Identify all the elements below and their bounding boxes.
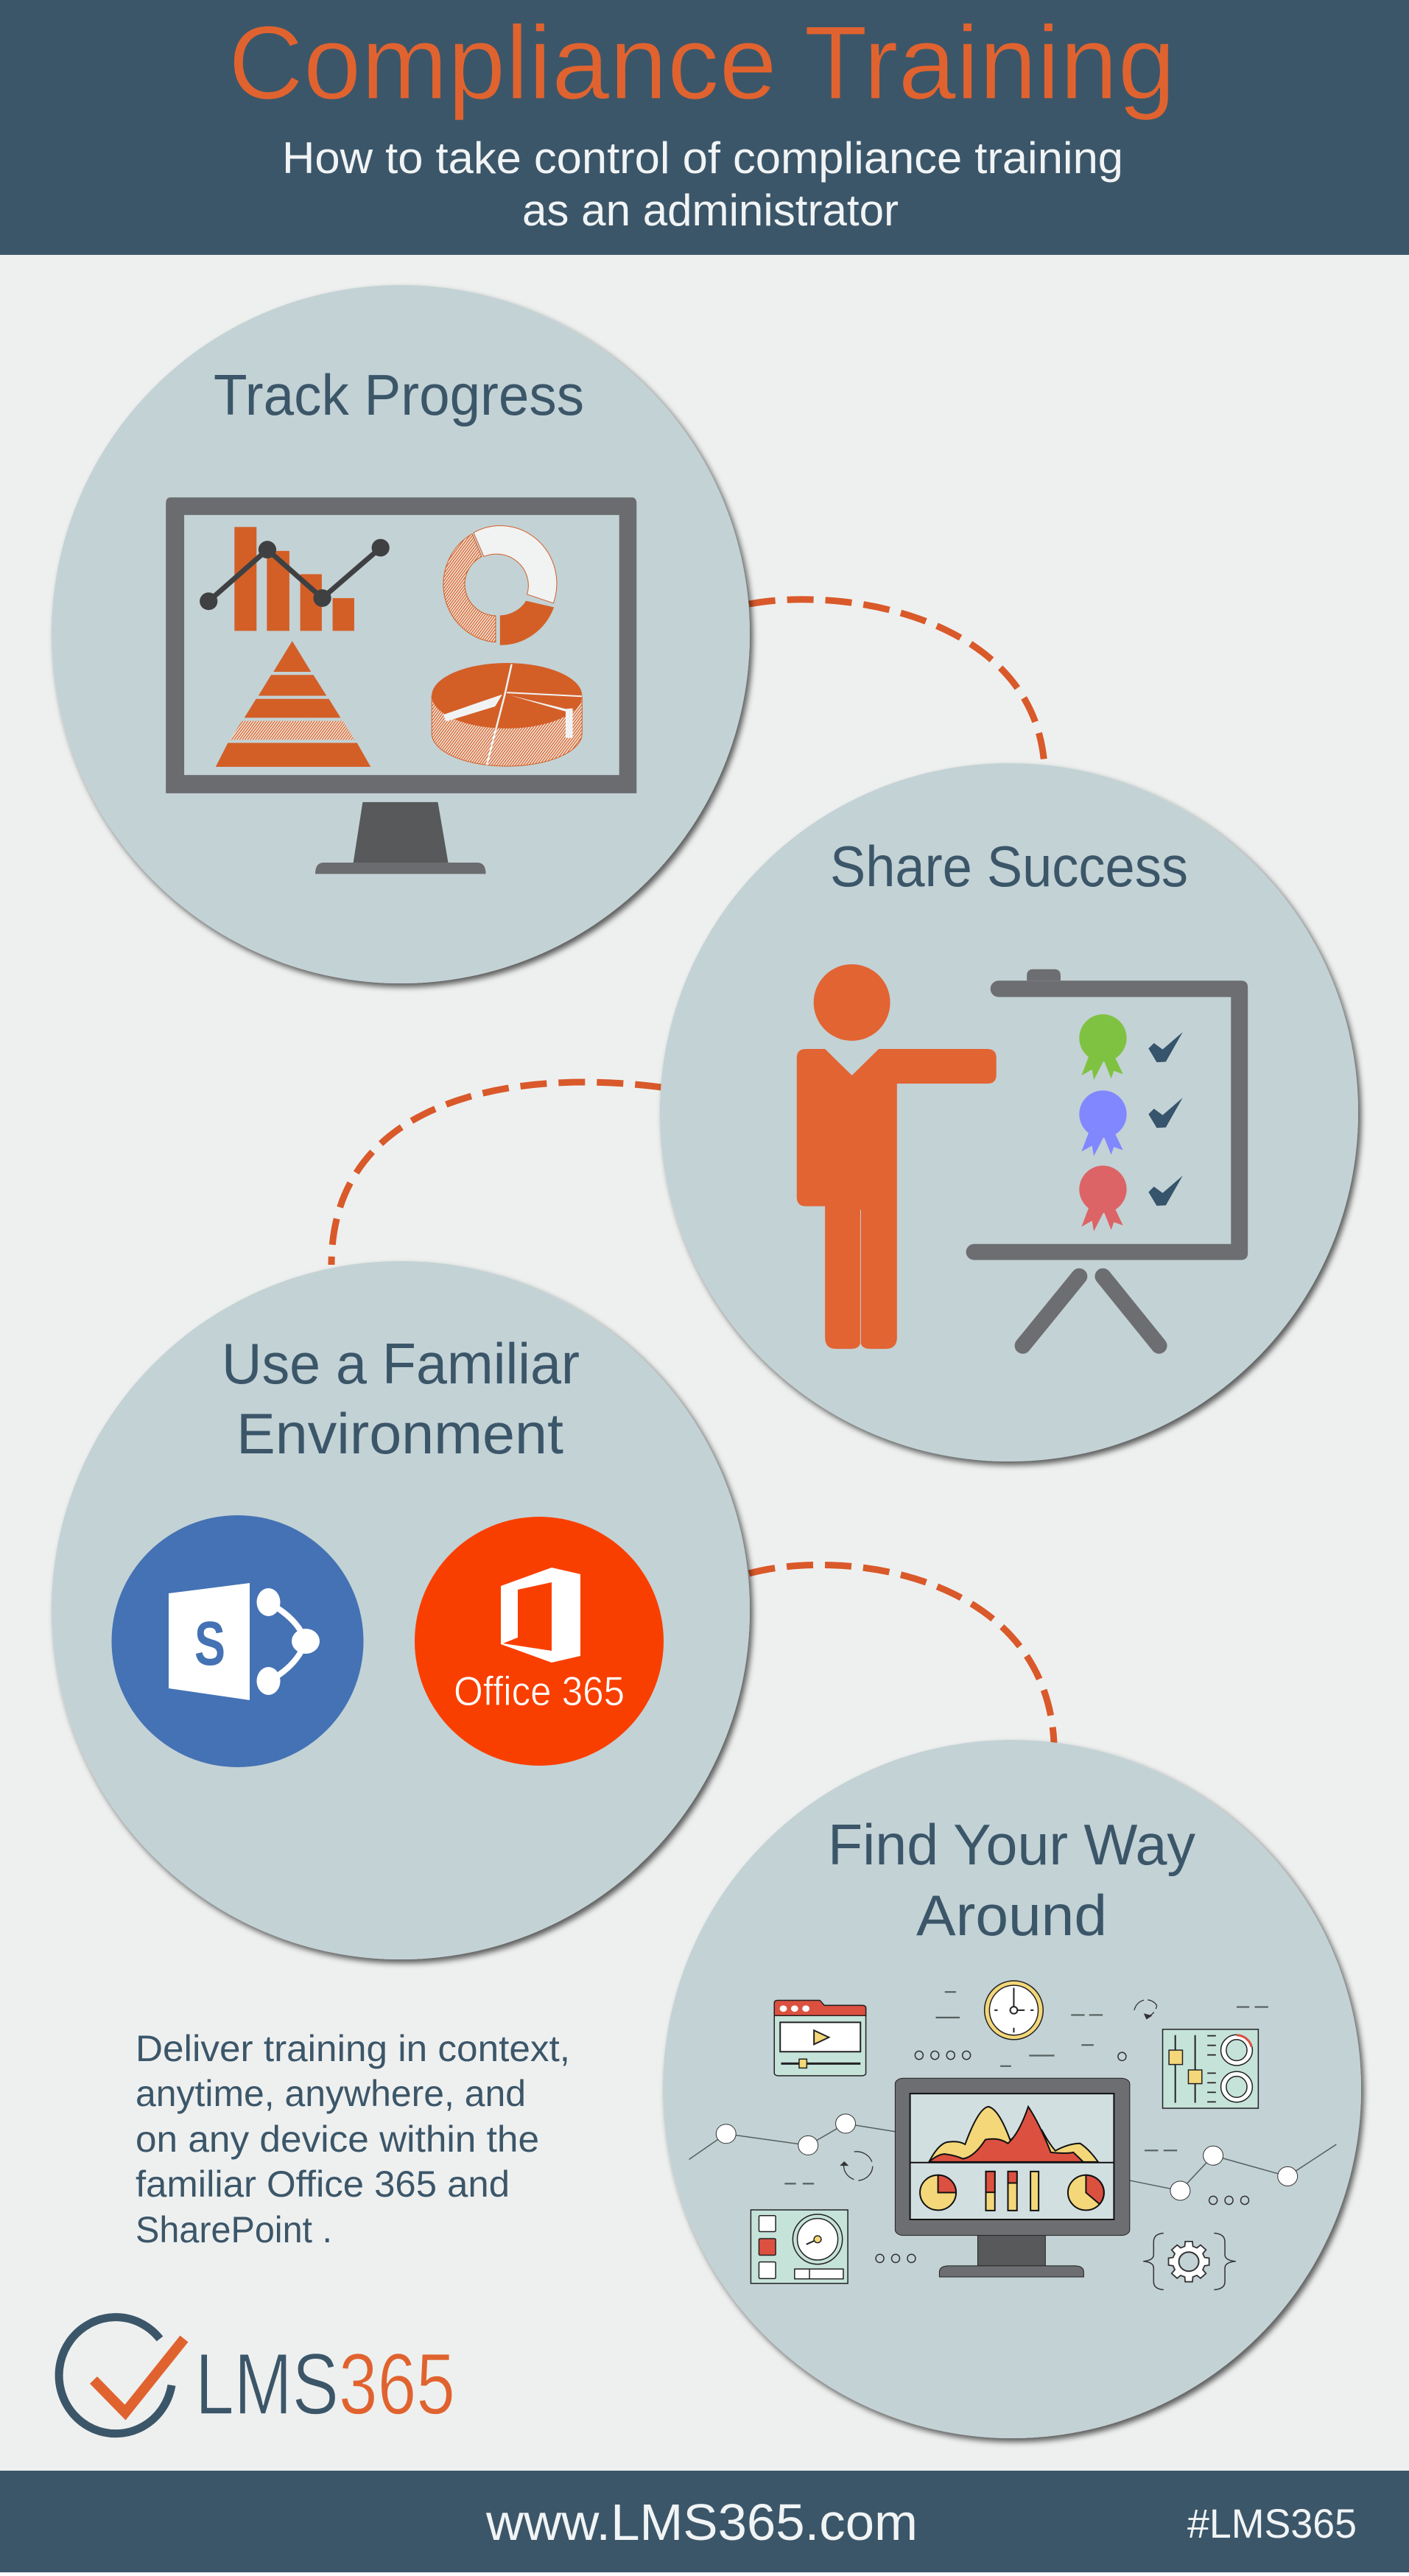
node line right xyxy=(1130,2144,1336,2200)
control panel right xyxy=(1163,2029,1258,2108)
heading: use a familiar environment xyxy=(222,1331,580,1466)
gear with braces xyxy=(1143,2233,1236,2289)
small dots xyxy=(876,2051,1249,2263)
ribbon: blue xyxy=(1079,1090,1127,1156)
subtitle: How to take control of compliance training xyxy=(282,133,1123,183)
icon: analytics dashboard illustration xyxy=(689,1981,1336,2289)
icon: presenter and board xyxy=(797,964,1248,1349)
video player window xyxy=(774,2000,866,2076)
hashtag: #LMS365 xyxy=(1187,2500,1357,2547)
panel: track progress xyxy=(52,285,750,983)
monitor xyxy=(895,2078,1130,2277)
website url: www.LMS365.com xyxy=(485,2493,918,2551)
heading: find your way around xyxy=(828,1812,1195,1948)
logo check mark xyxy=(94,2339,184,2412)
monitor stand xyxy=(315,802,486,874)
text block: deliver training: on any device within the xyxy=(136,2119,539,2160)
panel: share success xyxy=(660,763,1358,1461)
presenter xyxy=(797,964,997,1349)
heading: use a familiar environment: Environment xyxy=(236,1401,563,1466)
refresh arcs xyxy=(840,2000,1157,2180)
heading: find your way around: Around xyxy=(916,1883,1107,1948)
presentation board xyxy=(966,969,1248,1346)
text block: deliver training: anytime, anywhere, and xyxy=(136,2073,526,2114)
heading: find your way around: Find Your Way xyxy=(828,1812,1195,1877)
text block: deliver training: SharePoint . xyxy=(136,2209,332,2250)
footer band xyxy=(0,2471,1409,2572)
subtitle: as an administrator xyxy=(522,186,899,235)
bar chart xyxy=(234,527,354,631)
icon: monitor with charts xyxy=(166,497,636,874)
check marks xyxy=(1148,1032,1183,1206)
icon: office 365 xyxy=(415,1517,664,1766)
dashed connector: familiar environment to find your way xyxy=(749,1565,1054,1743)
logo wordmark: LMS365 xyxy=(195,2336,455,2433)
icon: office 365: Office 365 xyxy=(454,1668,625,1714)
line chart xyxy=(200,539,390,610)
logo: LMS365 xyxy=(59,2317,455,2434)
heading: track progress: Track Progress xyxy=(214,362,584,427)
area chart xyxy=(929,2107,1098,2162)
gauge panel lower left xyxy=(751,2210,848,2284)
text block: deliver training: familiar Office 365 and xyxy=(136,2163,510,2205)
3D pie chart xyxy=(432,663,582,766)
ribbon: red xyxy=(1079,1165,1127,1231)
icon: sharepoint: S xyxy=(194,1609,225,1678)
pyramid chart xyxy=(216,641,370,767)
header band xyxy=(0,0,1409,255)
subtitle xyxy=(282,133,1123,235)
icon: sharepoint xyxy=(112,1515,364,1767)
dashed connector: share success to familiar environment xyxy=(331,1082,661,1265)
text block: deliver training xyxy=(136,2028,570,2250)
node line left xyxy=(689,2114,895,2159)
heading: share success: Share Success xyxy=(830,834,1188,899)
pie charts and bars xyxy=(920,2172,1104,2211)
short dashes xyxy=(784,1992,1268,2183)
heading: use a familiar environment: Use a Familiar xyxy=(222,1331,580,1396)
text block: deliver training: Deliver training in context, xyxy=(136,2028,570,2069)
donut chart xyxy=(443,526,557,645)
title: Compliance Training xyxy=(228,4,1176,122)
clock xyxy=(985,1981,1043,2040)
panel: find your way around xyxy=(663,1740,1361,2438)
monitor frame xyxy=(166,497,636,793)
ribbon: green xyxy=(1079,1014,1127,1080)
panel: use a familiar environment xyxy=(52,1261,750,1959)
dashed connector: track progress to share success xyxy=(749,600,1044,766)
logo ring xyxy=(59,2317,172,2434)
